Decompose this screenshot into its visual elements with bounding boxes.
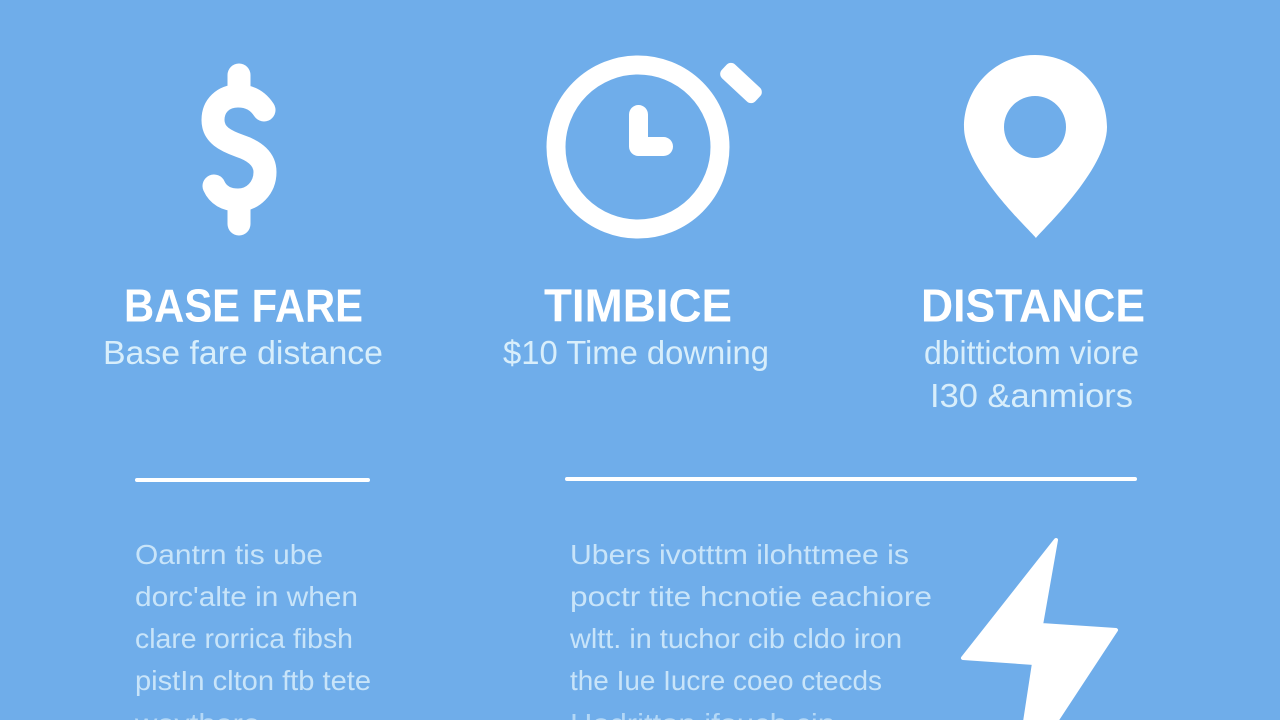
subtext: base fare: Base fare distance (103, 334, 383, 371)
text block: right paragraph: Ubers ivotttm ilohttmee is (570, 539, 909, 570)
text block: right paragraph (569, 539, 932, 720)
heading: time: TIMBICE (544, 280, 732, 332)
text block: left paragraph (134, 539, 371, 720)
icon: location pin (964, 55, 1107, 238)
heading: base fare: BASE FARE (124, 280, 363, 332)
icon: stopwatch (556, 60, 764, 229)
subtext: time: $10 Time downing (503, 334, 769, 371)
heading: distance: DISTANCE (921, 280, 1145, 332)
text block: right paragraph: the Iue Iucre coeo ctecds (570, 665, 882, 696)
text block: left paragraph: pistIn clton ftb tete (135, 665, 371, 696)
subtext: distance: dbittictom viore (924, 334, 1139, 371)
text block: right paragraph: poctr tite hcnotie eachiore (570, 581, 932, 612)
text block: left paragraph: dorc'alte in when (135, 581, 358, 612)
text block: left paragraph: clare rorrica fibsh (135, 623, 353, 654)
subtext: distance: I30 &anmiors (930, 377, 1133, 414)
subtext: distance (924, 334, 1139, 414)
divider: left (135, 478, 370, 482)
icon: lightning bolt (963, 540, 1116, 720)
divider: right (565, 477, 1137, 481)
text block: left paragraph: Oantrn tis ube (135, 539, 323, 570)
text block: right paragraph: wltt. in tuchor cib cldo iron (569, 623, 902, 654)
icon: dollar sign (213, 75, 265, 224)
